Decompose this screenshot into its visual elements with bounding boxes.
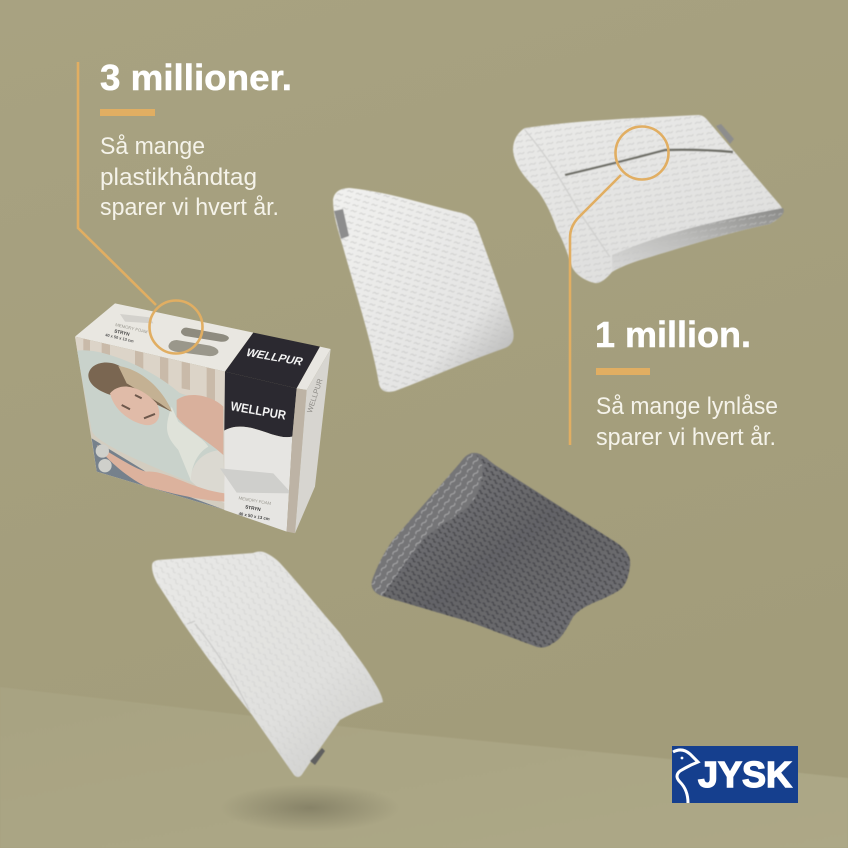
pillow: grey contour bbox=[372, 453, 630, 648]
callout: 1 million bbox=[595, 314, 778, 451]
heading: 1 million. bbox=[595, 314, 751, 355]
box top label: MEMORY FOAM bbox=[115, 322, 148, 334]
pillow tag bbox=[334, 209, 349, 239]
body text: sparer vi hvert år. bbox=[596, 424, 776, 451]
blue sheet bbox=[92, 438, 225, 510]
pillow: white contour, top right bbox=[513, 115, 784, 283]
box front white panel bbox=[224, 427, 292, 532]
floor bbox=[0, 687, 848, 848]
panel label: STRYN bbox=[245, 504, 262, 512]
gold bar bbox=[596, 368, 650, 375]
pillow front face shading bbox=[612, 208, 784, 272]
body text bbox=[596, 393, 778, 451]
box side text: WELLPUR bbox=[305, 377, 324, 414]
body text: Så mange bbox=[100, 133, 205, 160]
box top label bbox=[105, 322, 148, 344]
right circle bbox=[616, 126, 668, 180]
shoulder and arm bbox=[177, 395, 223, 455]
floor shadow under pillow bbox=[220, 784, 400, 832]
pillow: white soft, bottom left bbox=[152, 552, 383, 777]
box top label: STRYN bbox=[114, 328, 131, 337]
panel label: 40 x 50 x 13 cm bbox=[238, 511, 270, 521]
callout lines and circles bbox=[78, 62, 668, 445]
panel label bbox=[238, 495, 272, 521]
eyes and mouth bbox=[122, 395, 155, 418]
circle badges bbox=[96, 444, 109, 458]
panel label: MEMORY FOAM bbox=[238, 495, 272, 506]
pillow: white square, centre bbox=[333, 188, 514, 392]
box side face bbox=[295, 349, 331, 533]
product box bbox=[73, 303, 331, 533]
forearm bbox=[97, 445, 225, 502]
bird icon bbox=[673, 750, 698, 803]
side edge bbox=[525, 130, 610, 257]
body text: plastikhåndtag bbox=[100, 164, 257, 191]
tag bbox=[716, 124, 734, 144]
heading: 3 millioner. bbox=[100, 57, 292, 98]
box top label: 40 x 50 x 13 cm bbox=[105, 332, 135, 344]
hair bbox=[88, 363, 172, 412]
callout: 3 millioner bbox=[100, 57, 292, 221]
box top black band bbox=[225, 333, 320, 388]
logo text: JYSK bbox=[698, 754, 792, 795]
box photo bbox=[73, 333, 227, 513]
box front black band bbox=[224, 372, 297, 437]
body text bbox=[100, 133, 279, 221]
pillow tag bbox=[310, 748, 325, 765]
gold bar bbox=[100, 109, 155, 116]
box right flap bbox=[297, 347, 331, 390]
left circle bbox=[150, 300, 202, 354]
curtain stripes bbox=[75, 337, 225, 410]
panel pillow bbox=[220, 468, 292, 493]
white pillow bbox=[77, 350, 223, 483]
box small top pillow bbox=[120, 314, 153, 323]
box front right strip bbox=[287, 388, 307, 533]
face bbox=[110, 387, 159, 425]
left leader line bbox=[78, 62, 156, 305]
top wellpur logo: WELLPUR bbox=[244, 347, 305, 368]
end cap bbox=[372, 453, 483, 596]
tank top bbox=[167, 407, 208, 480]
body text: sparer vi hvert år. bbox=[100, 194, 279, 221]
body text: Så mange lynlåse bbox=[596, 393, 778, 420]
zipper seam bbox=[565, 150, 733, 175]
box handle slots bbox=[181, 328, 229, 342]
right leader line bbox=[570, 175, 621, 445]
JYSK logo bbox=[672, 746, 798, 803]
lower sheets bbox=[190, 450, 225, 503]
box top face bbox=[75, 303, 253, 372]
front wellpur logo: WELLPUR bbox=[229, 399, 287, 423]
